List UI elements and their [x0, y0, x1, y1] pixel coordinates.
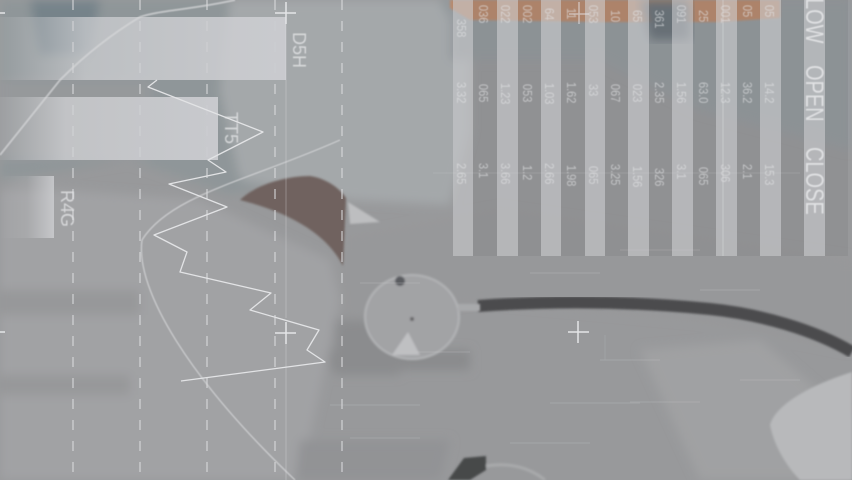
- bar labels: [57, 32, 309, 227]
- table values: 05: [762, 5, 777, 17]
- table values: 2.1: [740, 164, 755, 179]
- table values: 1.56: [630, 166, 645, 188]
- bar: R4G: [0, 176, 54, 238]
- bar chart: [0, 17, 286, 238]
- table values: 1.98: [564, 165, 579, 187]
- second stethoscope fitting: [448, 456, 545, 480]
- table values: 1.2: [520, 165, 535, 180]
- table values: 65: [630, 10, 645, 22]
- table header labels: CLOSE: [800, 147, 828, 215]
- table values: 001: [718, 5, 733, 24]
- coat pocket at lower right: [770, 372, 852, 480]
- table values: 10: [608, 10, 623, 22]
- table values: 065: [696, 167, 711, 186]
- table values: [454, 5, 777, 188]
- table values: 3.1: [674, 164, 689, 179]
- table values: 326: [652, 168, 667, 187]
- table values: 067: [608, 84, 623, 103]
- table values: 1.62: [564, 82, 579, 104]
- table values: 33: [586, 84, 601, 96]
- table values: 036: [476, 5, 491, 24]
- table values: 358: [454, 19, 469, 38]
- table values: 25: [696, 10, 711, 22]
- table values: 091: [674, 5, 689, 24]
- table values: 3.1: [476, 163, 491, 178]
- table values: 12.3: [718, 82, 733, 104]
- table values: 023: [630, 84, 645, 103]
- table values: 2.35: [652, 82, 667, 104]
- table values: 361: [652, 10, 667, 29]
- table values: 3.32: [454, 82, 469, 104]
- table values: 3.66: [498, 163, 513, 185]
- table values: 065: [476, 84, 491, 103]
- table values: 306: [718, 164, 733, 183]
- table header labels: OPEN: [800, 65, 828, 122]
- dashed vertical grid lines: [73, 0, 342, 480]
- stethoscope chest piece: [365, 275, 480, 359]
- stethoscope tube: [478, 302, 852, 352]
- table values: 36.2: [740, 82, 755, 104]
- bar: D5H: [0, 17, 286, 80]
- orange band: [450, 0, 780, 22]
- table values: 64: [542, 8, 557, 20]
- table values: 1.56: [674, 82, 689, 104]
- table values: 05: [740, 5, 755, 17]
- bar labels: R4G: [57, 190, 77, 227]
- table values: 053: [586, 5, 601, 24]
- table values: 2.65: [454, 163, 469, 185]
- table values: 3.25: [608, 164, 623, 186]
- bar labels: D5H: [289, 32, 309, 68]
- curved thin lines: [0, 0, 340, 480]
- table values: 1.23: [498, 83, 513, 105]
- table values: 14.2: [762, 82, 777, 104]
- table values: 1.03: [542, 83, 557, 105]
- table header labels: [800, 0, 828, 215]
- table values: 11: [564, 8, 579, 20]
- scan lines: [330, 250, 800, 443]
- table values: 022: [498, 5, 513, 24]
- table values: 053: [520, 84, 535, 103]
- table values: 15.3: [762, 164, 777, 186]
- table values: 2.66: [542, 163, 557, 185]
- dark skin patch: [240, 176, 346, 266]
- table values: 065: [586, 166, 601, 185]
- table values: 63.0: [696, 82, 711, 104]
- bar: TT5: [0, 97, 218, 160]
- table values: 002: [520, 5, 535, 24]
- bar labels: TT5: [221, 112, 241, 144]
- line chart: [148, 80, 325, 381]
- table stripes: [453, 0, 848, 256]
